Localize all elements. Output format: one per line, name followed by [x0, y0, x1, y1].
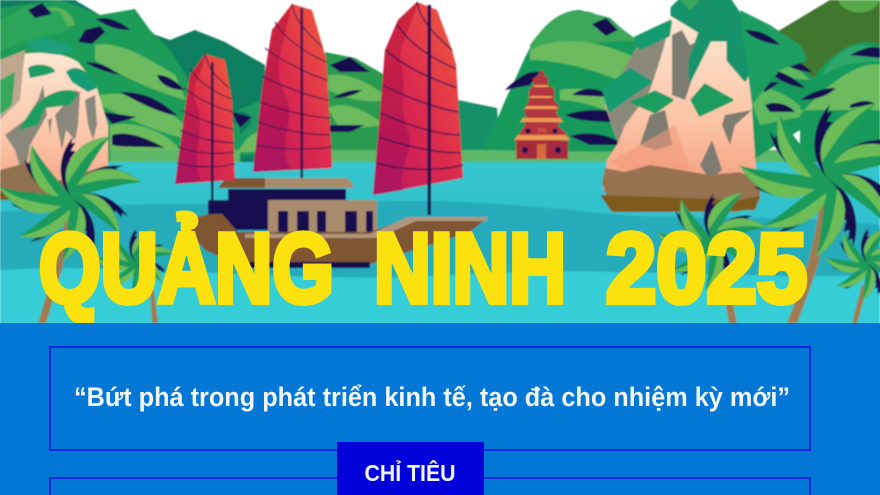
slogan box	[50, 347, 810, 450]
targets tab	[337, 442, 484, 495]
sail 3	[373, 2, 463, 215]
hills: right range behind pagoda	[480, 0, 880, 165]
water	[0, 162, 880, 324]
slogan text: “Bứt phá trong phát triển kinh tế, tạo đà cho nhiệm kỳ mới”	[74, 382, 790, 412]
title: NINH	[374, 213, 566, 323]
junk boat	[175, 2, 488, 268]
boat hull and cabin	[183, 178, 488, 268]
right large palm	[734, 91, 880, 323]
hills: left range	[0, 0, 265, 165]
right small palm	[823, 221, 880, 323]
sail 1	[175, 54, 235, 207]
targets label: CHỈ TIÊU	[364, 458, 456, 486]
sky background	[0, 0, 880, 324]
sail 2	[253, 4, 332, 178]
blue lower panel	[0, 323, 880, 495]
left large palm	[0, 126, 143, 323]
left small palm	[93, 222, 175, 323]
pagoda	[514, 70, 570, 159]
left limestone rock	[0, 3, 108, 200]
title: 2025	[606, 213, 807, 323]
title: QUẢNG	[39, 213, 334, 323]
bay scene illustration	[0, 0, 880, 324]
title	[39, 213, 807, 323]
hills: centre range between sails	[325, 52, 880, 163]
centre-right small palm	[653, 185, 768, 323]
targets box	[50, 478, 810, 495]
right limestone rock	[600, 0, 808, 212]
